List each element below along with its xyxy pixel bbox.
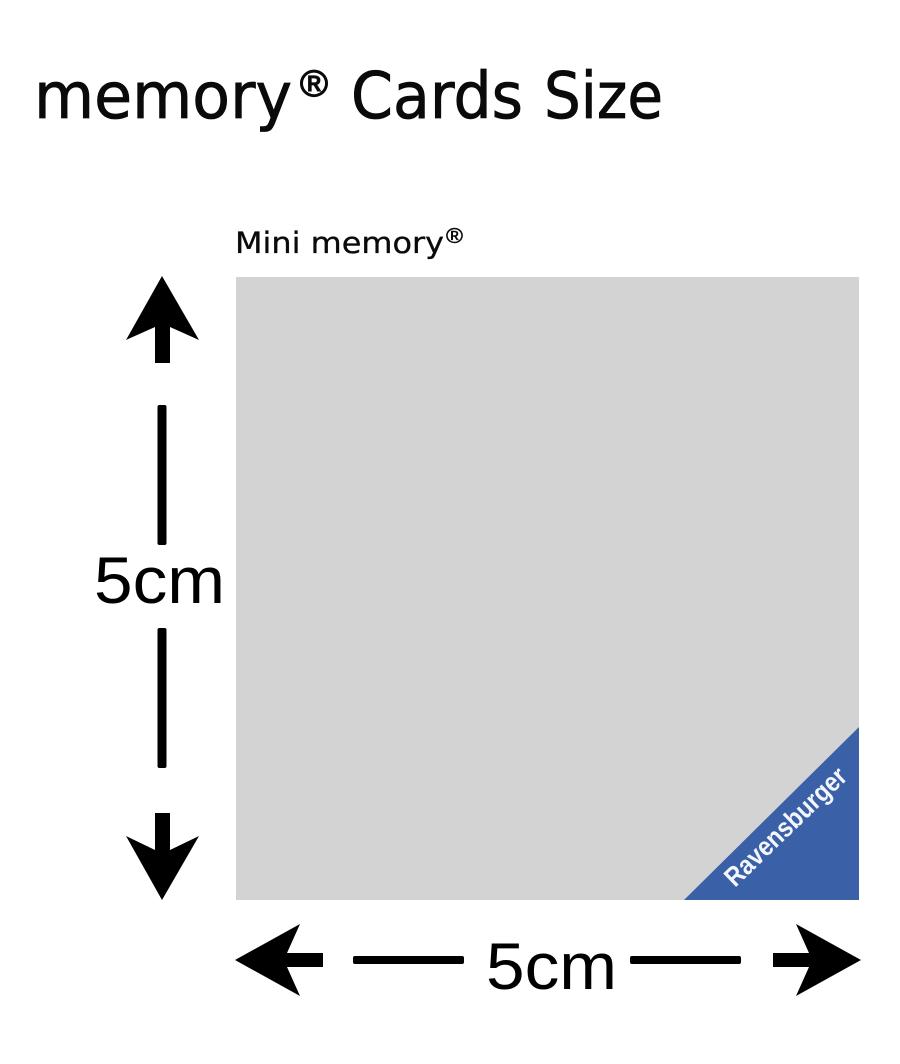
left arrow bbox=[235, 924, 323, 996]
title: memory bbox=[34, 60, 292, 134]
right arrow bbox=[773, 924, 861, 996]
down arrow bbox=[126, 813, 199, 900]
blue corner with logo bbox=[684, 727, 859, 900]
horizontal 5cm label: 5cm bbox=[486, 929, 617, 1003]
blue corner with logo: Ravensburger bbox=[718, 761, 853, 892]
card bbox=[236, 277, 859, 900]
title bbox=[34, 60, 663, 134]
title: ® bbox=[300, 63, 328, 104]
card label: ® bbox=[446, 225, 464, 248]
title: Size bbox=[544, 60, 663, 134]
up arrow bbox=[126, 276, 199, 363]
vertical dimension arrow bbox=[94, 276, 225, 900]
horizontal dimension arrow bbox=[235, 924, 861, 1003]
card label: Mini memory bbox=[235, 226, 444, 260]
vertical 5cm label: 5cm bbox=[94, 543, 225, 617]
title: Cards bbox=[351, 60, 523, 134]
